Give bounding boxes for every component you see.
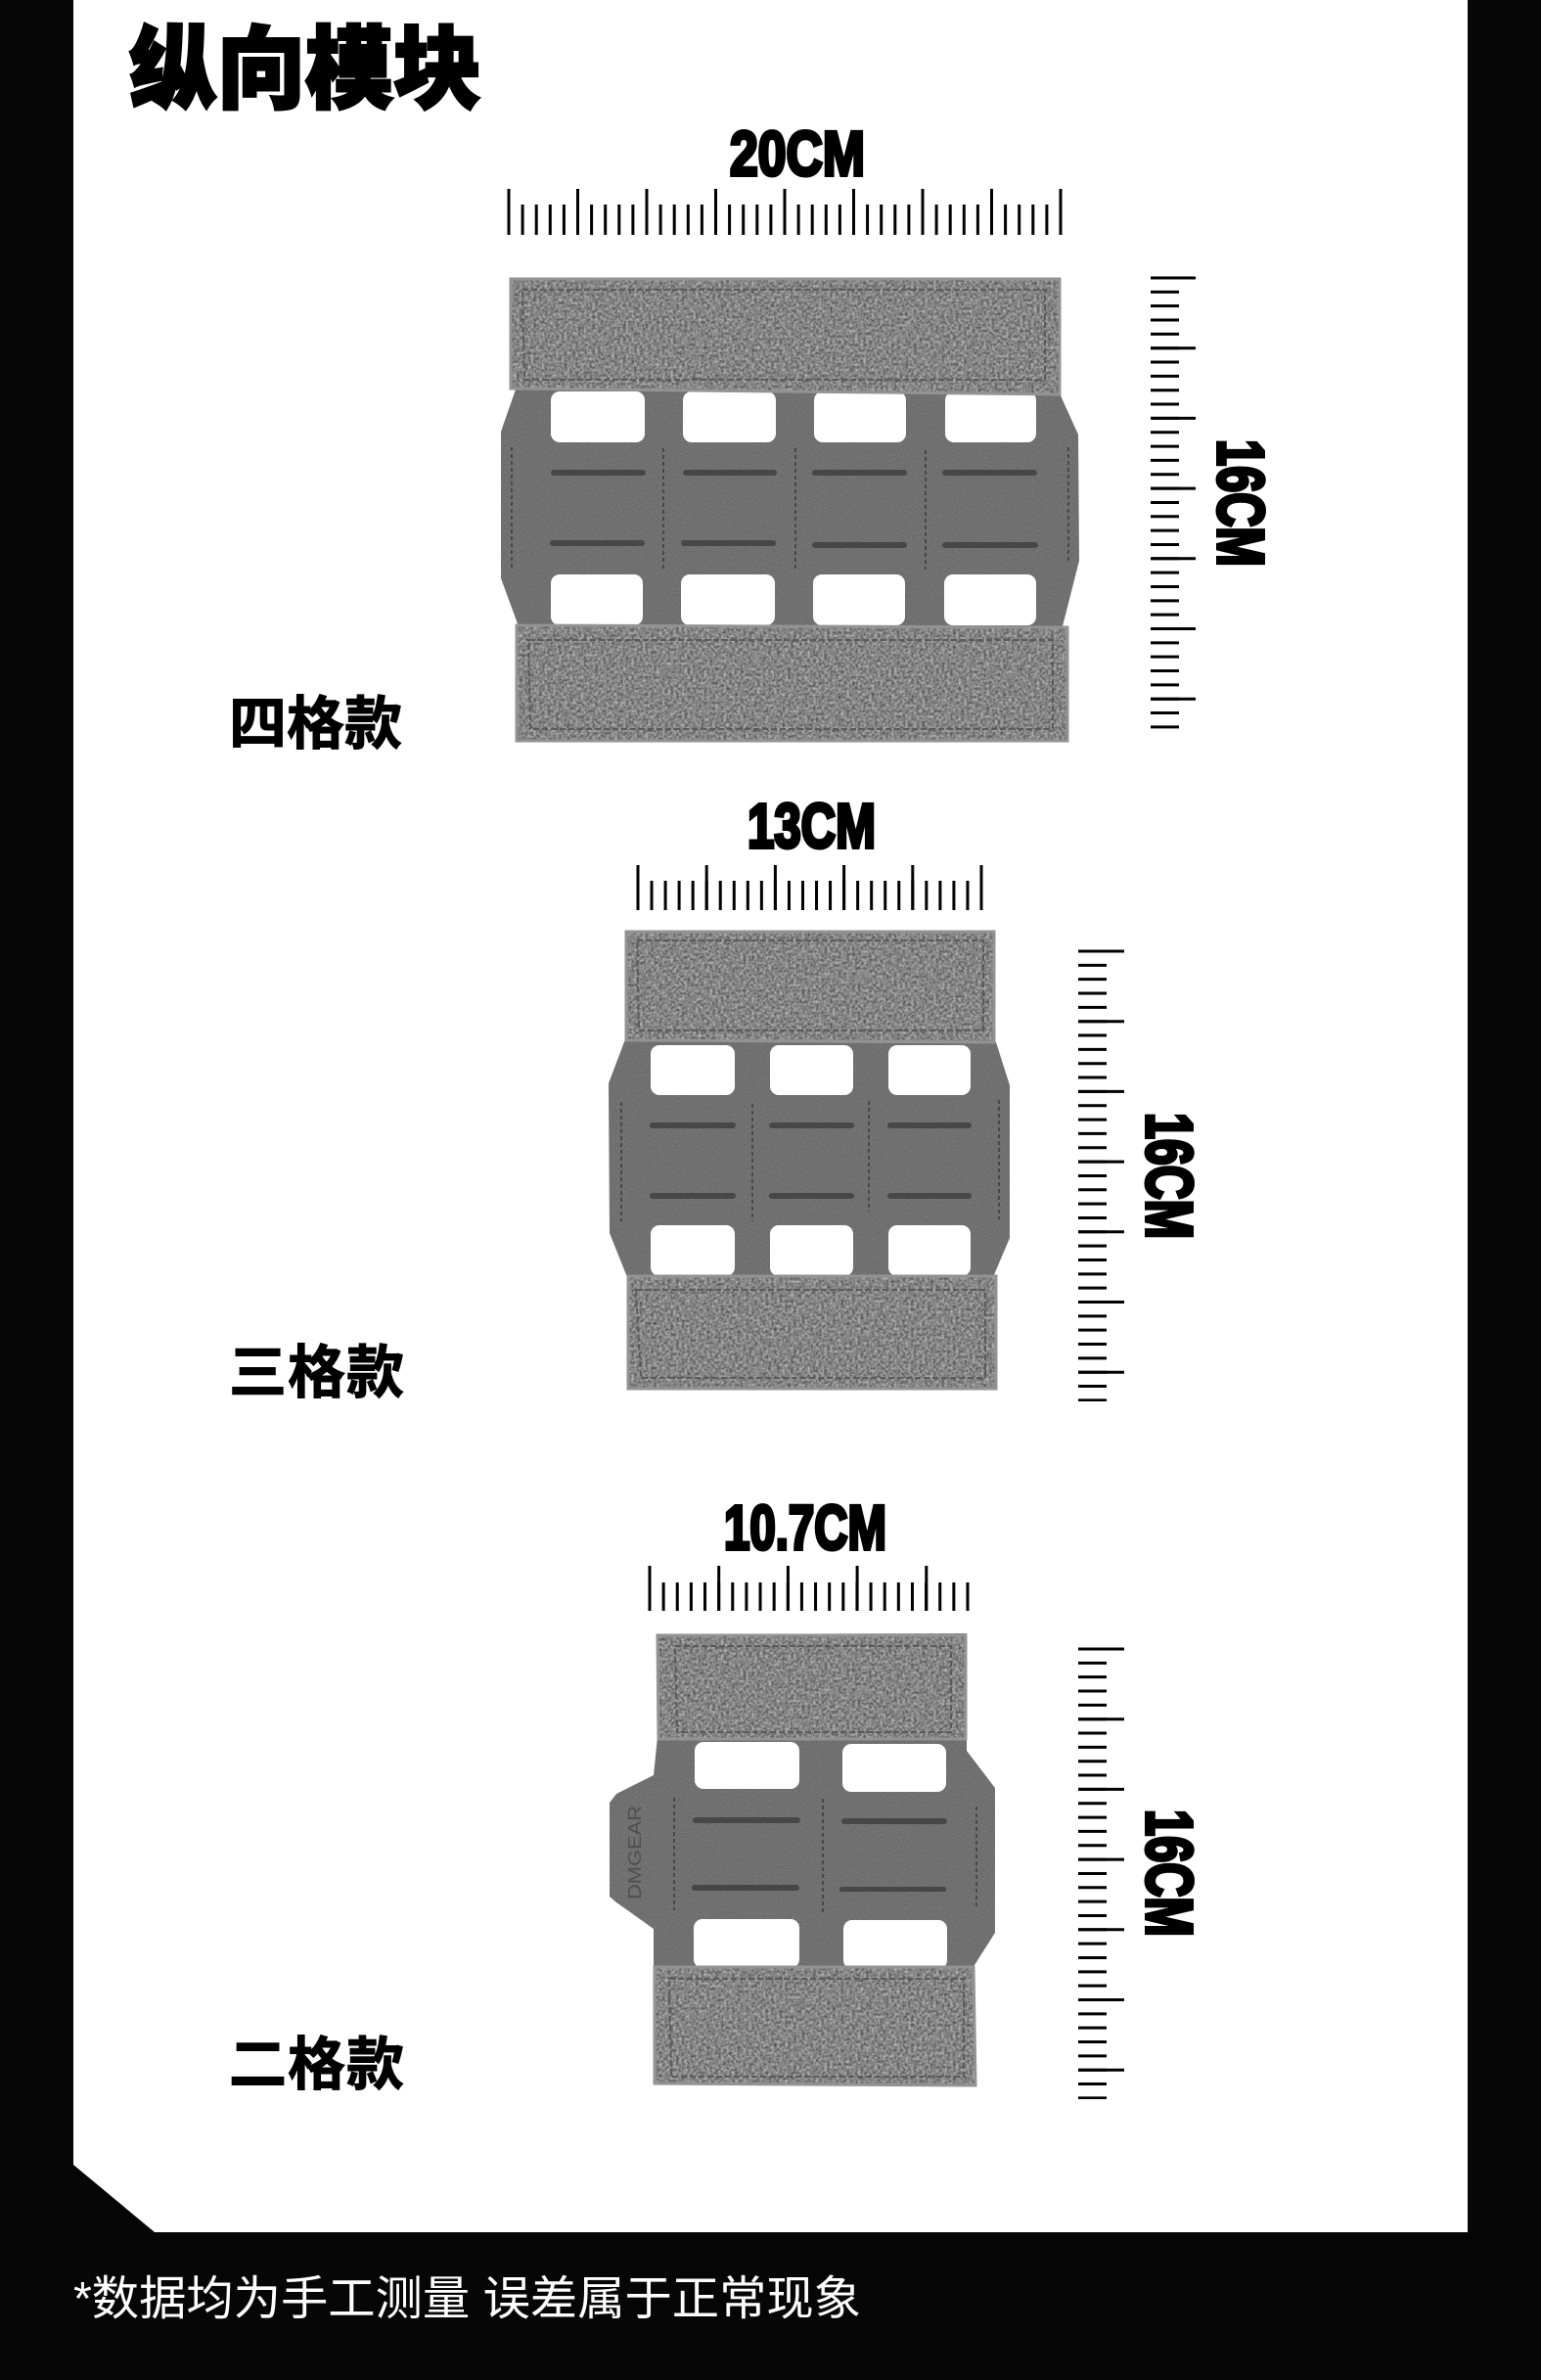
horizontal ruler 13CM <box>636 888 983 895</box>
title: 纵向模块 <box>129 21 481 120</box>
section: two-slot module <box>229 1492 1205 2099</box>
height dimension: 16CM: 16CM <box>1203 439 1277 567</box>
logo text on tab: DMGEAR <box>625 1806 645 1899</box>
vertical ruler 16CM <box>1164 276 1173 729</box>
footnote: *数据均为手工测量 误差属于正常现象 <box>73 2273 861 2325</box>
horizontal ruler 20CM <box>507 211 1063 219</box>
section: three-slot module <box>229 791 1205 1405</box>
width dimension: 10.7CM: 10.7CM <box>724 1492 886 1563</box>
module photo: four-slot panel <box>501 278 1079 742</box>
module photo: two-slot panel <box>610 1633 995 2086</box>
module photo: three-slot panel <box>609 931 1010 1390</box>
horizontal ruler 10.7CM <box>648 1588 971 1597</box>
height dimension: 16CM: 16CM <box>1132 1809 1205 1937</box>
section: four-slot module <box>229 118 1277 756</box>
width dimension: 13CM: 13CM <box>748 791 876 861</box>
vertical ruler 16CM <box>1092 949 1102 1401</box>
vertical ruler 16CM <box>1092 1648 1102 2099</box>
height dimension: 16CM: 16CM <box>1132 1113 1205 1239</box>
label: four-slot: 四格款 <box>229 692 402 756</box>
width dimension: 20CM: 20CM <box>730 118 865 189</box>
label: two-slot: 二格款 <box>229 2033 404 2097</box>
label: three-slot: 三格款 <box>229 1341 404 1405</box>
